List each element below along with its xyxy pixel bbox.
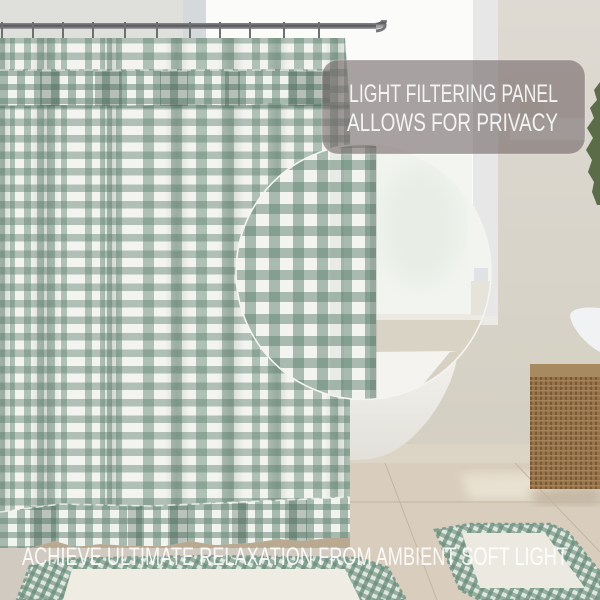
- wicker basket: [530, 364, 600, 489]
- window: [206, 0, 498, 325]
- callout panel: [322, 60, 585, 154]
- wall in circle: [376, 320, 480, 352]
- rug: left bath mat: [17, 556, 406, 600]
- horizontal gingham stripes: [0, 38, 350, 550]
- plant: [586, 82, 600, 205]
- sink: [570, 307, 600, 352]
- vertical gingham stripes: [0, 38, 350, 550]
- floor tiles: [0, 463, 600, 600]
- shower curtain rod with rings: [0, 20, 385, 38]
- wall background: [0, 0, 600, 470]
- wall shelf: [510, 98, 585, 140]
- bottle on sill: [471, 268, 490, 315]
- baseboard: [350, 444, 600, 463]
- top ruffle: [0, 70, 350, 108]
- magnified gingham: [230, 140, 376, 405]
- callout heading: [347, 80, 558, 137]
- magnified detail circle: [230, 140, 500, 405]
- curtain fold shadows: [0, 38, 350, 550]
- rug: right bath mat: [435, 524, 600, 600]
- window view in circle: [376, 154, 490, 281]
- bottom ruffle: [0, 497, 350, 552]
- tub in circle: [376, 351, 456, 398]
- gingham shower curtain: [0, 38, 350, 552]
- bathtub: [349, 350, 458, 460]
